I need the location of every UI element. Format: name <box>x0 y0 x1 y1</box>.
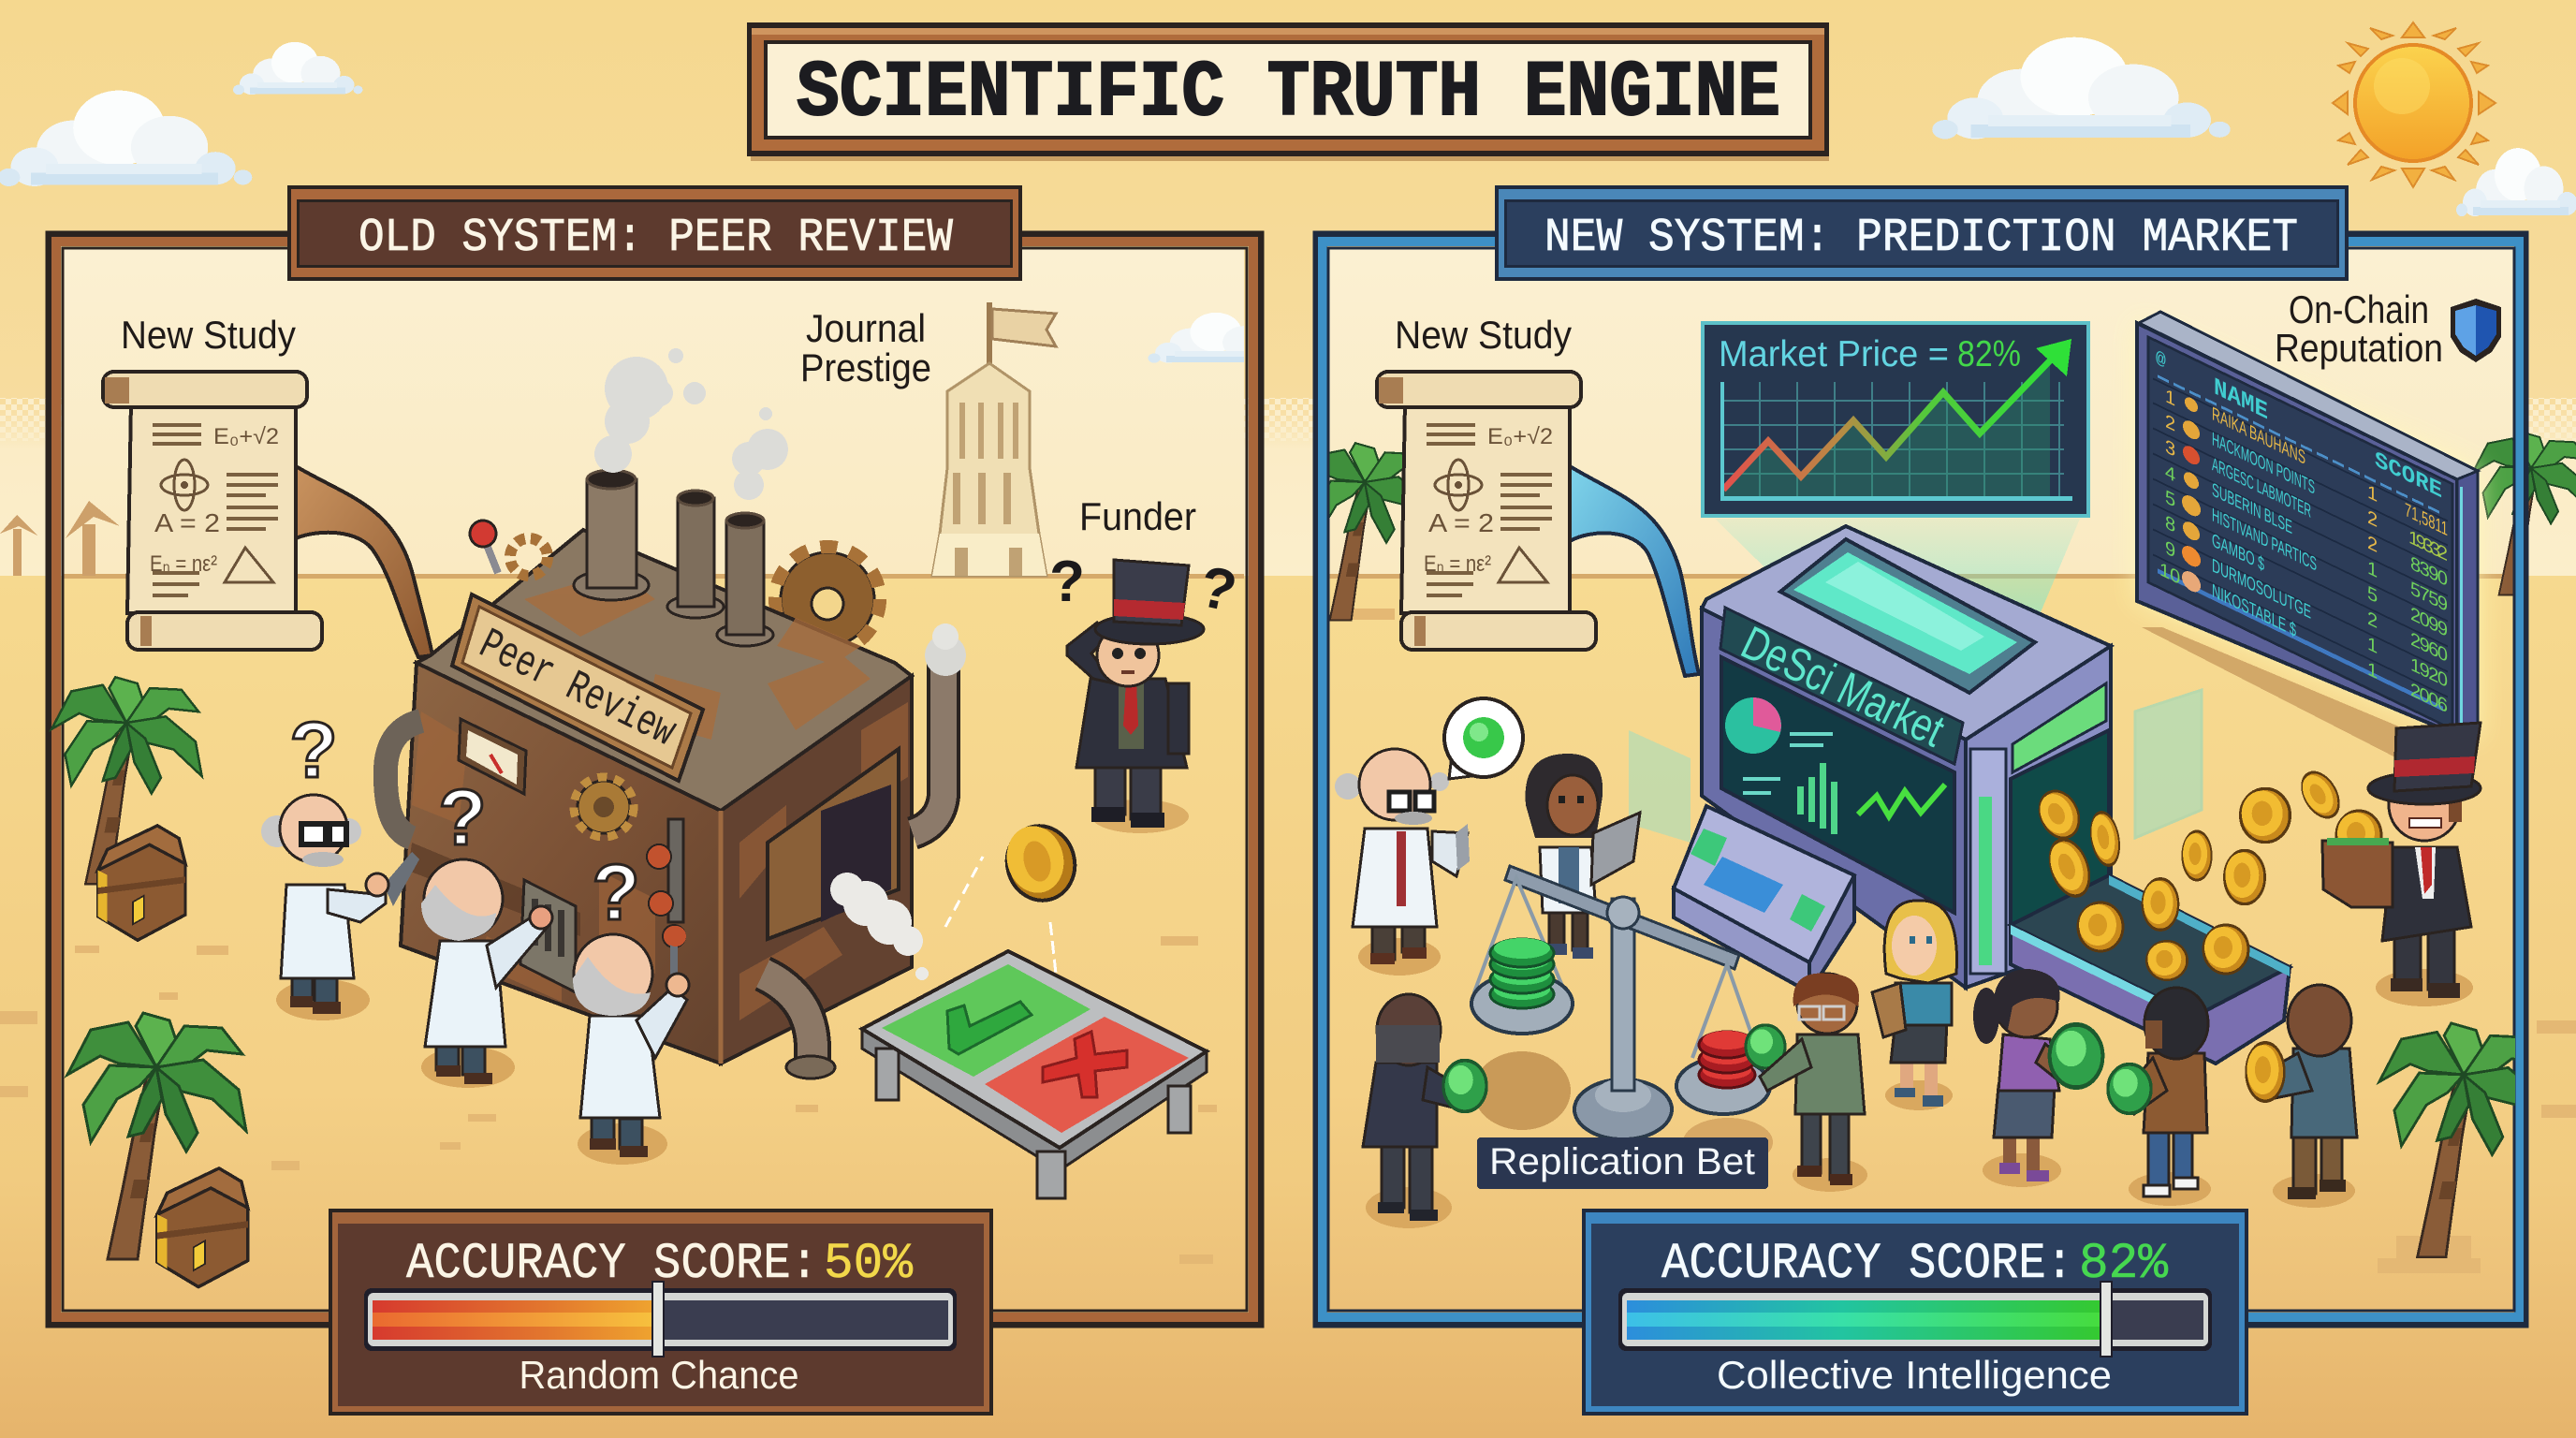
icon: scroll (new): A = 2 <box>1428 508 1494 537</box>
label: on-chain reputation: Reputation <box>2275 326 2443 370</box>
chart: leaderboard screen: 1 <box>2367 658 2378 683</box>
chart: leaderboard screen: HISTIVAND PARTICS <box>2212 505 2317 576</box>
label: new study (new): New Study <box>1395 313 1572 357</box>
glow: holographic beam <box>1715 519 2080 646</box>
chart: leaderboard screen: 19332 <box>2408 526 2448 565</box>
scale: left pan with green chips <box>1471 878 1573 1034</box>
machine: dashboard screen <box>1721 657 1954 913</box>
conveyor belt <box>2011 875 2290 1064</box>
scale: right pan with red chips <box>1676 964 1785 1114</box>
chart: leaderboard screen <box>2137 312 2478 740</box>
machine: red knob and small gear <box>470 521 548 576</box>
character: man in green shirt <box>1760 974 1867 1192</box>
panel frame: new system <box>1316 234 2525 1325</box>
score panel: old system <box>329 1209 993 1416</box>
pipe: left elbow <box>386 721 421 838</box>
palm: behind new panel left <box>1329 442 1402 622</box>
table: verdict table with check and cross <box>862 951 1207 1198</box>
machine: name strip <box>1720 608 1963 764</box>
title <box>747 22 1829 161</box>
scientist 2 <box>421 859 552 1088</box>
pipe: blue from scroll to market machine <box>1570 466 1699 676</box>
chart: leaderboard screen: 2099 <box>2410 603 2448 641</box>
chart: leaderboard screen: 2960 <box>2410 628 2448 667</box>
machine: front gear <box>574 777 634 837</box>
title: SCIENTIFIC TRUTH ENGINE <box>797 50 1780 139</box>
icon: scroll (new): E₀+√2 <box>1487 424 1553 449</box>
chart: market price: Market Price = <box>1719 334 1949 374</box>
score panel: old system: ACCURACY SCORE: <box>406 1236 818 1293</box>
chart: leaderboard screen: HACKMOON POINTS <box>2212 429 2315 499</box>
scientist 3 <box>573 926 689 1165</box>
chart: leaderboard screen: RAIKA BAUHANS <box>2212 404 2305 469</box>
machine: peer review sign <box>452 594 703 781</box>
character: man in blue shirt <box>2247 985 2357 1208</box>
chart: leaderboard screen: 2 <box>2367 608 2378 633</box>
meter: old accuracy bar <box>364 1282 957 1357</box>
icon: scroll (old): E₀+√2 <box>213 424 279 449</box>
chart: leaderboard screen: 1 <box>2165 386 2175 411</box>
chart: leaderboard screen: DURMOSOLUTGE <box>2212 555 2311 624</box>
chart: leaderboard screen: 5 <box>2367 582 2378 608</box>
chart: leaderboard screen: 2 <box>2165 411 2175 436</box>
chest: old panel upper <box>97 826 185 940</box>
panel: new system background <box>1327 248 2515 1311</box>
score panel: old system: 50% <box>824 1236 914 1293</box>
chart: leaderboard screen: SUBERIN BLSE <box>2212 479 2292 538</box>
character: happy funder with wallet <box>2322 723 2481 1006</box>
smoke: chimneys <box>594 348 788 500</box>
machine: gauge <box>459 719 526 794</box>
chart: leaderboard screen: 3 <box>2165 436 2175 462</box>
icon: scroll (new) <box>1377 372 1596 650</box>
label: on-chain reputation: On-Chain <box>2289 287 2429 331</box>
chart: market price: 82% <box>1957 334 2021 374</box>
machine: rusty peer review engine <box>401 530 912 1064</box>
scientist 1 <box>261 795 419 1020</box>
machine: console <box>1674 806 1854 992</box>
chart: leaderboard screen: @ <box>2156 347 2166 372</box>
sand texture <box>0 609 2576 1273</box>
callout: speech bubble with green dot <box>1444 698 1523 779</box>
character: woman with tablet <box>1526 754 1640 959</box>
pipe: bottom elbow <box>763 974 835 1078</box>
chart: leaderboard screen: 2 <box>2367 506 2378 532</box>
chart: leaderboard screen: 1 <box>2367 633 2378 658</box>
pipe: copper from scroll to machine <box>296 466 432 657</box>
icon: scroll (new): Eₙ = nε² <box>1424 551 1491 577</box>
icon: flipping gold coin <box>945 818 1083 974</box>
panel frame: old system <box>49 234 1261 1325</box>
machine: name strip: DeSci Market <box>1734 616 1953 756</box>
machine: DeSci market <box>1702 526 2111 988</box>
chart: leaderboard screen: 2 <box>2367 532 2378 557</box>
score panel: new system <box>1582 1209 2248 1416</box>
score panel: old system: Random Chance <box>519 1353 799 1397</box>
chest: old panel lower <box>157 1168 248 1287</box>
chart: leaderboard screen: 9 <box>2165 537 2175 563</box>
palm: new panel lower right <box>2376 1022 2515 1258</box>
chart: leaderboard screen: 5759 <box>2410 578 2448 616</box>
icon: scroll (old): Eₙ = nε² <box>150 551 217 577</box>
smoke: furnace exhaust <box>830 873 929 980</box>
character: blonde woman with clipboard <box>1872 901 1956 1110</box>
icon: journal prestige tower <box>932 302 1056 576</box>
heading: new system: NEW SYSTEM: PREDICTION MARKET <box>1544 212 2298 265</box>
icon: scroll (old) <box>103 372 322 650</box>
chart: leaderboard screen: SCORE <box>2375 447 2442 505</box>
icon: scroll (old): A = 2 <box>154 508 220 537</box>
label: new study (old): New Study <box>121 313 296 357</box>
character: man in brown jacket <box>2108 988 2211 1206</box>
character: man from behind, dark suit <box>1363 994 1486 1228</box>
icon: shield <box>2451 299 2501 362</box>
machine: peer review sign: Peer Review <box>471 621 683 758</box>
label: on-chain reputation <box>2275 287 2443 370</box>
question marks: funder: ? <box>1049 550 1085 614</box>
machine: control panels and levers <box>520 819 685 992</box>
cloud: inside old panel <box>1148 313 1244 363</box>
cloud: far right <box>2456 148 2576 216</box>
label: journal prestige <box>800 306 931 389</box>
machine: glass top tank <box>1780 539 2035 693</box>
machine: coin bay <box>1970 683 2109 974</box>
question mark 1: ? <box>289 706 338 794</box>
scale: replication balance <box>1471 866 1785 1167</box>
question mark 2: ? <box>438 773 487 861</box>
chart: leaderboard screen: 4 <box>2165 462 2175 487</box>
score panel: new system: Collective Intelligence <box>1717 1353 2112 1397</box>
machine: back gear <box>775 547 880 652</box>
scale: pole and base <box>1505 866 1739 1139</box>
distant palm silhouettes <box>0 501 120 576</box>
chart: leaderboard screen: NIKOSTABLE $ <box>2212 580 2296 641</box>
chart: leaderboard screen: ARGESC LABMOTER <box>2212 454 2311 522</box>
background: desert ground <box>0 576 2576 1438</box>
palm: old panel upper <box>51 677 202 884</box>
shadow: leaderboard <box>2142 627 2452 777</box>
label: funder: Funder <box>1079 494 1196 538</box>
panel: old system background <box>62 248 1244 1311</box>
heading: new system <box>1495 185 2349 281</box>
question mark 3: ? <box>592 848 640 936</box>
chart: leaderboard screen: 1920 <box>2410 653 2448 692</box>
coins: falling and on conveyor <box>2032 766 2347 980</box>
character: scientist with speech bubble <box>1335 749 1470 976</box>
cloud: top right <box>1932 37 2231 139</box>
chart: leaderboard screen: 10 <box>2159 559 2180 589</box>
label: journal prestige: Prestige <box>800 345 931 389</box>
heading: old system <box>287 185 1022 281</box>
heading: old system: OLD SYSTEM: PEER REVIEW <box>359 212 953 265</box>
machine: furnace door <box>768 749 899 939</box>
chart: leaderboard screen: 1 <box>2367 481 2378 506</box>
machine: chimneys <box>574 470 773 646</box>
background: desert sky <box>0 0 2576 576</box>
cloud: top left small <box>233 42 363 95</box>
holo panel: right floating <box>2135 690 2202 838</box>
character: woman in purple <box>1973 969 2102 1187</box>
chart: leaderboard screen: 5 <box>2165 487 2175 512</box>
holo panel: left floating <box>1629 730 1690 843</box>
glow: leaderboard halo <box>2137 321 2478 740</box>
question marks: funder: ? <box>1193 554 1242 624</box>
pipe: right exhaust <box>913 624 966 833</box>
palm: right edge behind frame <box>2472 433 2576 594</box>
character: confused funder <box>1067 560 1204 833</box>
palm: old panel lower <box>67 1013 246 1259</box>
question marks: funder <box>1049 550 1242 624</box>
label: journal prestige: Journal <box>806 306 926 350</box>
meter: new accuracy bar <box>1618 1282 2212 1357</box>
icon: wallet of coins <box>2322 811 2393 907</box>
chart: leaderboard screen: 71,5811 <box>2405 499 2448 540</box>
chart: leaderboard screen: 2006 <box>2410 679 2448 717</box>
label: replication bet: Replication Bet <box>1489 1141 1755 1182</box>
label: replication bet <box>1477 1137 1768 1189</box>
cloud: top left large <box>0 91 252 186</box>
chart: leaderboard screen: GAMBO $ <box>2212 530 2264 576</box>
icon: sun <box>2333 22 2496 187</box>
score panel: new system: ACCURACY SCORE: <box>1661 1236 2073 1293</box>
chart: market price <box>1703 323 2088 516</box>
chart: leaderboard screen: NAME <box>2214 374 2268 427</box>
chart: leaderboard screen: 8 <box>2165 512 2175 537</box>
chart: leaderboard screen: 8390 <box>2410 552 2448 591</box>
chart: leaderboard screen: 1 <box>2367 557 2378 582</box>
score panel: new system: 82% <box>2079 1236 2169 1293</box>
